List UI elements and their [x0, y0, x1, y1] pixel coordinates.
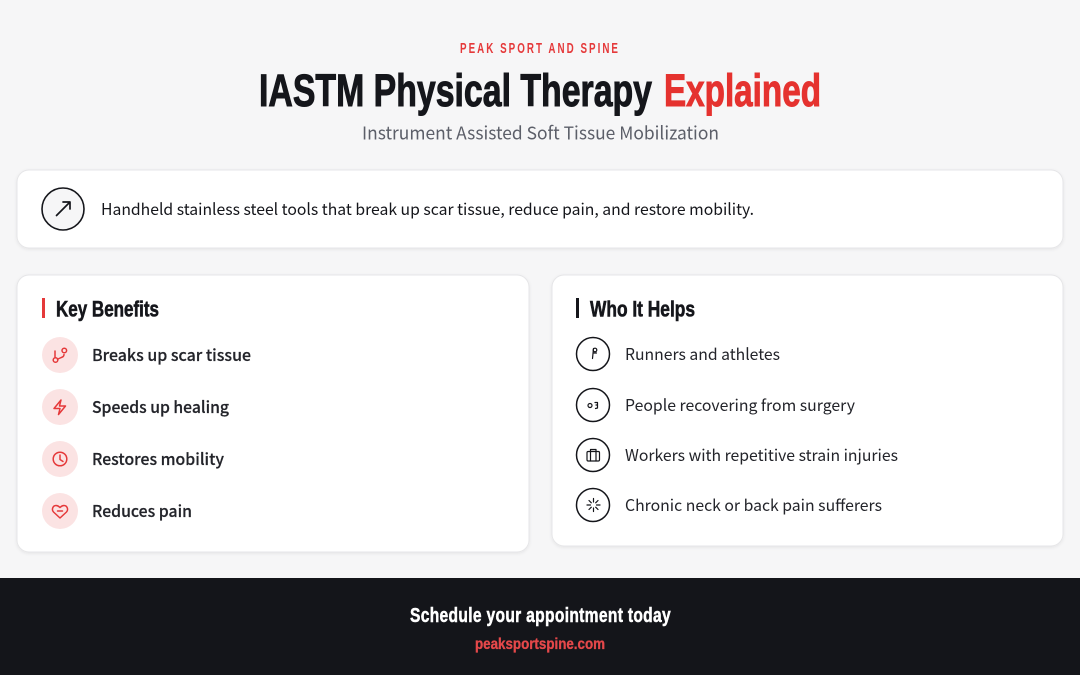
- audience: chronic neck or back pain sufferers: [576, 488, 882, 522]
- call to action: Schedule your appointment today: [410, 605, 671, 627]
- title: IASTM Physical Therapy: [259, 65, 652, 116]
- panel: who it helps: [552, 275, 1063, 546]
- benefit: breaks up scar tissue: Breaks up scar tissue: [92, 342, 251, 366]
- eyebrow: brand name: PEAK SPORT AND SPINE: [460, 41, 620, 57]
- heading: key benefits: Key Benefits: [56, 296, 159, 322]
- benefit: restores mobility: [42, 441, 224, 477]
- title: Explained: [664, 65, 821, 116]
- audience: people recovering from surgery: [576, 388, 856, 422]
- panel: key benefits: [17, 275, 529, 552]
- audience: runners and athletes: Runners and athletes: [625, 341, 780, 365]
- footer: [0, 578, 1080, 675]
- audience: workers with repetitive strain injuries: Workers with repetitive strain injuries: [625, 442, 898, 466]
- benefit: reduces pain: Reduces pain: [92, 498, 192, 522]
- icon: arrow: [42, 188, 84, 230]
- website: peaksportspine.com: [475, 636, 605, 653]
- benefit: speeds up healing: [42, 389, 229, 425]
- audience: people recovering from surgery: People recovering from surgery: [625, 392, 856, 416]
- audience: chronic neck or back pain sufferers: Chronic neck or back pain sufferers: [625, 492, 882, 516]
- heading: who it helps: Who It Helps: [590, 296, 695, 322]
- benefit: speeds up healing: Speeds up healing: [92, 394, 229, 418]
- benefit: reduces pain: [42, 493, 192, 529]
- heading: key benefits: [42, 296, 159, 322]
- definition text: Handheld stainless steel tools that break up scar tissue, reduce pain, and restore mobility.: [101, 196, 754, 220]
- benefit: restores mobility: Restores mobility: [92, 446, 224, 470]
- audience: runners and athletes: [576, 338, 780, 370]
- audience: workers with repetitive strain injuries: [576, 438, 898, 472]
- subtitle: Instrument Assisted Soft Tissue Mobilization: [362, 120, 719, 146]
- panel: definition: [17, 170, 1063, 248]
- benefit: breaks up scar tissue: [42, 337, 251, 373]
